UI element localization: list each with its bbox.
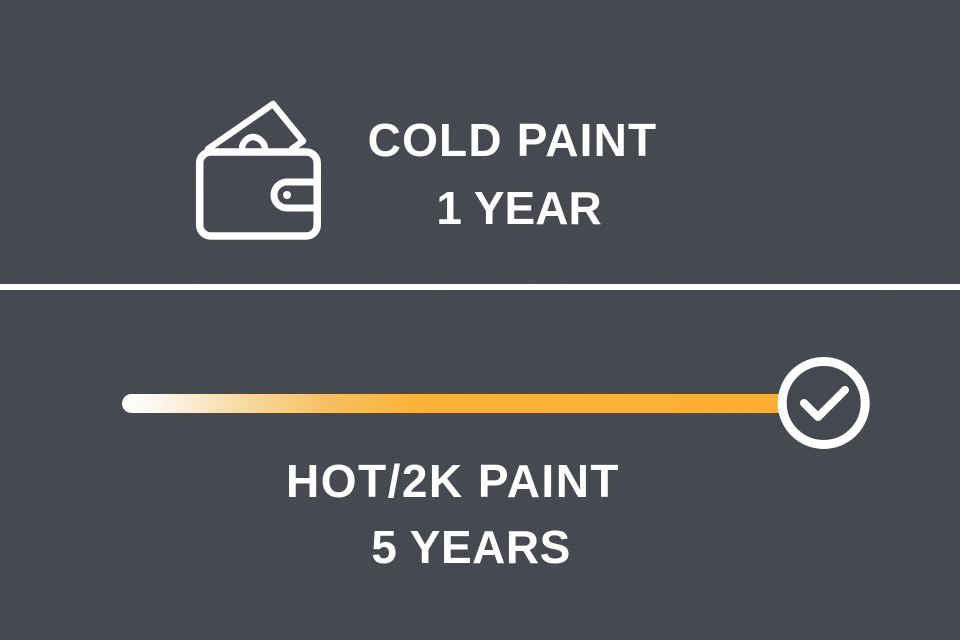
heading: 5 years: 5 YEARS [371,521,571,573]
progress bar: white to amber gradient [122,394,792,413]
icon: wallet with banknote [196,100,321,240]
heading: 1 year: 1 YEAR [436,182,602,234]
heading: hot/2k paint: HOT/2K PAINT [286,455,620,507]
icon: check mark in circle [778,357,870,449]
heading: cold paint: COLD PAINT [368,114,657,166]
divider line [0,284,960,290]
